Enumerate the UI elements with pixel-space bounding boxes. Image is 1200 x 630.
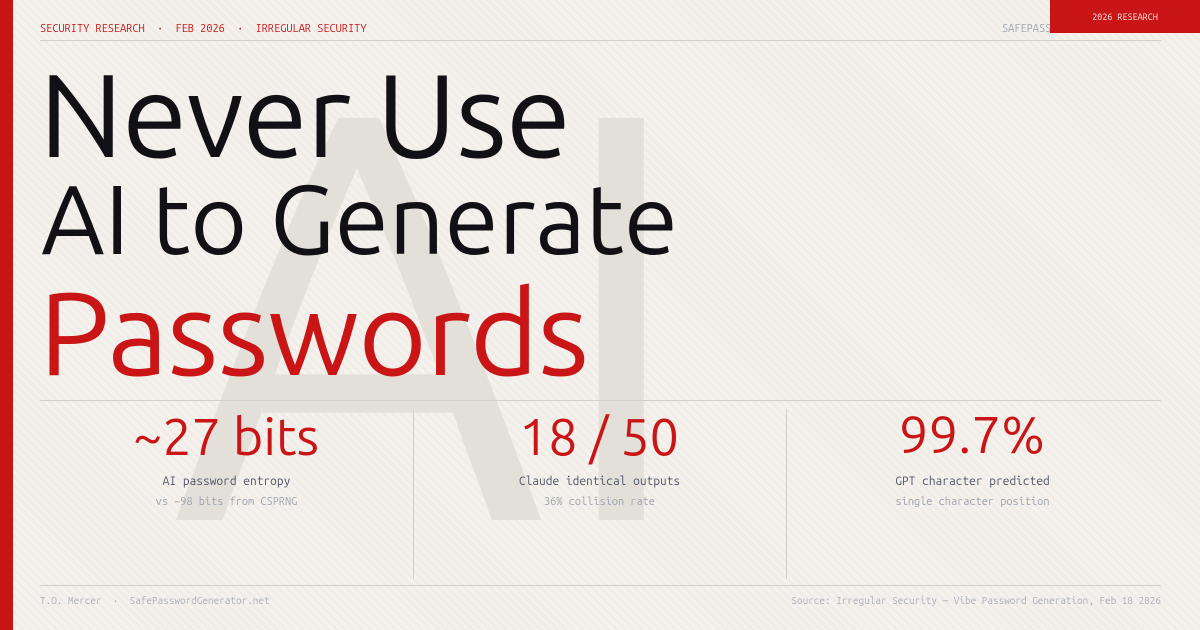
footer credit: T.O. Mercer · SafePasswordGenerator.net bbox=[40, 595, 270, 606]
corner badge: 2026 RESEARCH bbox=[1092, 12, 1158, 22]
header site name: SAFEPASSWORDGENERATOR.NET bbox=[1002, 23, 1156, 35]
stat note: collisions: 36% collision rate bbox=[544, 496, 655, 508]
stat divider bbox=[786, 409, 787, 579]
stat value: prediction: 99.7% bbox=[899, 405, 1045, 463]
header rule bbox=[40, 40, 1161, 41]
stat value: collisions: 18 / 50 bbox=[519, 407, 679, 465]
stats top rule bbox=[40, 400, 1161, 401]
corner badge bbox=[1050, 0, 1200, 33]
title bbox=[39, 48, 678, 398]
stat note: entropy: vs ~98 bits from CSPRNG bbox=[156, 496, 297, 508]
stat label: prediction: GPT character predicted bbox=[895, 475, 1050, 488]
stat value: entropy: ~27 bits bbox=[133, 407, 319, 465]
title: AI to Generate bbox=[41, 163, 678, 273]
stat divider bbox=[413, 409, 414, 579]
left red accent bar bbox=[0, 0, 13, 630]
header eyebrow: SECURITY RESEARCH · FEB 2026 · IRREGULAR SECURITY bbox=[40, 23, 366, 35]
stat note: prediction: single character position bbox=[896, 496, 1050, 508]
stat label: collisions: Claude identical outputs bbox=[519, 475, 680, 488]
stat label: entropy: AI password entropy bbox=[163, 475, 290, 488]
title: Never Use bbox=[39, 48, 571, 180]
footer rule bbox=[40, 585, 1161, 586]
title: Passwords bbox=[39, 266, 589, 398]
footer source: Source: Irregular Security — Vibe Password Generation, Feb 18 2026 bbox=[791, 595, 1161, 606]
